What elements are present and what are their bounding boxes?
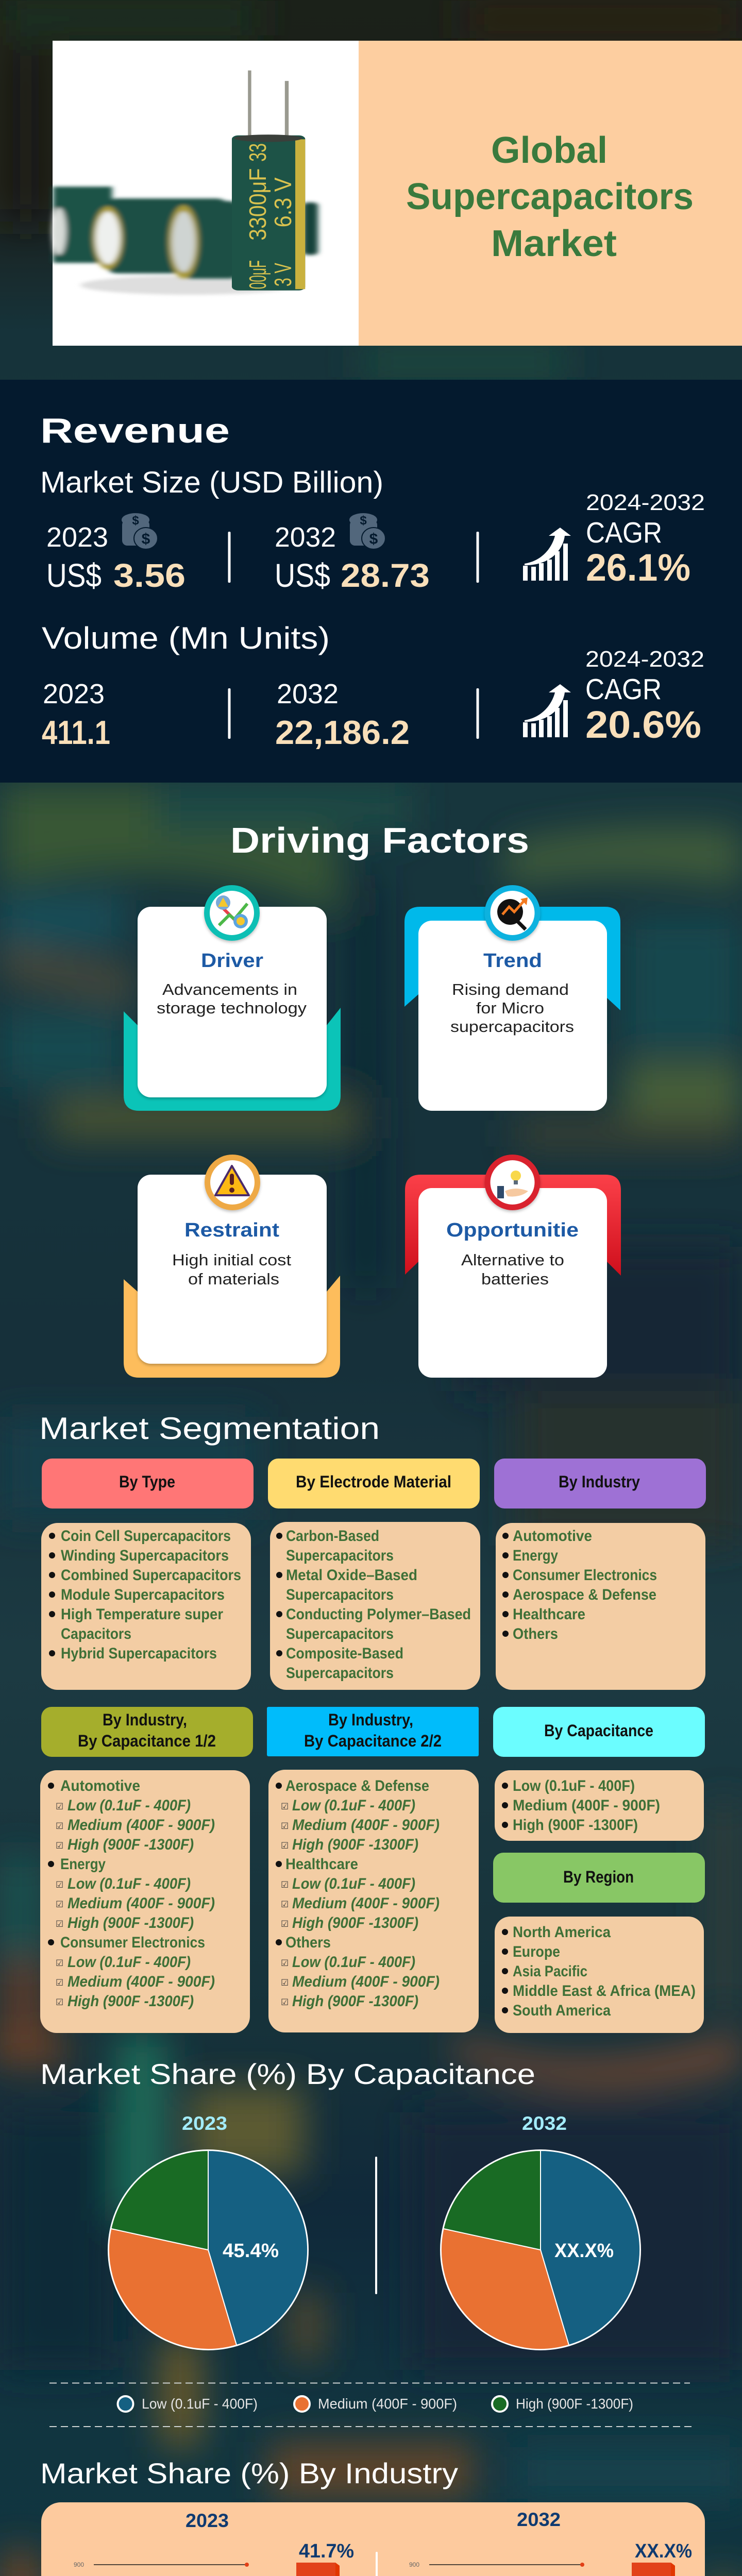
- stat: volume 2023: 2023: [43, 679, 105, 709]
- legend: capacitance: Low (0.1uF - 400F): [142, 2396, 258, 2412]
- bar chart: 2032: 900: [409, 2561, 419, 2568]
- icon: hand and bulb: [497, 1171, 528, 1198]
- list: by industry by capacitance 2/2: ☑: [281, 1841, 289, 1851]
- list: by industry by capacitance 1/2: Low (0.1uF - 400F): [68, 1875, 191, 1892]
- card: restraint: High initial cost: [172, 1251, 291, 1269]
- header: by industry: [494, 1459, 706, 1509]
- list: by industry by capacitance 2/2: Medium (400F - 900F): [292, 1817, 440, 1834]
- list: by industry by capacitance 2/2: High (900F -1300F): [292, 1836, 418, 1853]
- divider: [228, 688, 231, 739]
- title panel: Global: [491, 130, 608, 171]
- list: by electrode material: Supercapacitors: [286, 1665, 394, 1682]
- list: by industry by capacitance 1/2: Low (0.1uF - 400F): [68, 1797, 191, 1814]
- legend: capacitance: Medium (400F - 900F): [318, 2396, 457, 2412]
- list: by industry by capacitance 2/2: Low (0.1uF - 400F): [292, 1875, 415, 1892]
- list: by industry by capacitance 1/2: Energy: [60, 1856, 106, 1873]
- icon: coins 2032: $: [369, 531, 378, 548]
- title panel: Supercapacitors: [406, 176, 694, 217]
- icon: coins 2023: [122, 513, 158, 549]
- stat: CAGR revenue: 2024-2032: [586, 490, 705, 515]
- list: by industry by capacitance 1/2: Low (0.1uF - 400F): [68, 1954, 191, 1971]
- card: driver: storage technology: [157, 999, 307, 1017]
- panel: revenue: [0, 380, 742, 783]
- card: trend: Trend: [483, 950, 542, 972]
- list: by electrode material: Supercapacitors: [286, 1547, 394, 1564]
- icon: warning: [215, 1166, 249, 1195]
- header: by industry by capacitance 1/2: [41, 1707, 253, 1757]
- list: by electrode material: [270, 1522, 480, 1690]
- icon: driver: [216, 895, 248, 928]
- stat: CAGR volume: 2024-2032: [585, 647, 704, 672]
- bar chart: 2023: [74, 2510, 354, 2576]
- icon: coins 2023: $: [142, 531, 150, 548]
- list: by industry: [496, 1523, 705, 1690]
- list: by industry by capacitance 1/2: Medium (400F - 900F): [68, 1895, 215, 1912]
- list: by type: Capacitors: [61, 1625, 131, 1642]
- list: by type: Combined Supercapacitors: [61, 1567, 241, 1584]
- list: by industry by capacitance 2/2: Healthcare: [285, 1856, 358, 1873]
- heading: driving factors: Driving Factors: [230, 820, 529, 860]
- list: by type: Hybrid Supercapacitors: [61, 1645, 217, 1662]
- list: by industry by capacitance 2/2: High (900F -1300F): [292, 1993, 418, 2010]
- list: by industry by capacitance 2/2: [268, 1770, 479, 2032]
- list: by industry by capacitance 2/2: High (900F -1300F): [292, 1914, 418, 1931]
- bar chart: 2032: 2032: [517, 2509, 561, 2530]
- list: by region: [495, 1917, 704, 2033]
- list: by industry by capacitance 1/2: High (900F -1300F): [68, 1914, 194, 1931]
- header: by capacitance: By Capacitance: [544, 1721, 653, 1740]
- stat: market size 2023: 3.56: [113, 557, 185, 594]
- list: by industry by capacitance 2/2: Medium (400F - 900F): [292, 1973, 440, 1990]
- icon: coins 2023: $: [132, 514, 139, 528]
- list: by type: Winding Supercapacitors: [61, 1547, 229, 1564]
- stat: CAGR volume: 20.6%: [585, 703, 701, 746]
- list: by electrode material: Carbon-Based: [286, 1528, 379, 1545]
- list: by industry by capacitance 1/2: ☑: [56, 1841, 63, 1851]
- list: by industry by capacitance 2/2: ☑: [281, 1958, 289, 1969]
- bar chart: 2023: 41.7%: [299, 2540, 354, 2562]
- list: by electrode material: Conducting Polymer–Based: [286, 1606, 471, 1623]
- stat: CAGR revenue: 26.1%: [586, 546, 690, 589]
- list: by industry by capacitance 1/2: ☑: [56, 1958, 63, 1969]
- list: by industry: Consumer Electronics: [513, 1567, 657, 1584]
- list: by industry by capacitance 2/2: ☑: [281, 1821, 289, 1832]
- title panel: [359, 41, 742, 346]
- list: by industry by capacitance 2/2: Low (0.1uF - 400F): [292, 1954, 415, 1971]
- list: by type: High Temperature super: [61, 1606, 223, 1623]
- list: by industry by capacitance 1/2: High (900F -1300F): [68, 1993, 194, 2010]
- list: by industry: Aerospace & Defense: [513, 1586, 656, 1603]
- header: by industry by capacitance 1/2: By Capacitance 1/2: [78, 1732, 216, 1750]
- stat: market size 2032: [275, 522, 430, 594]
- icon: growth chart: [523, 684, 571, 737]
- list: by industry by capacitance 2/2: ☑: [281, 1802, 289, 1812]
- stat: CAGR volume: [585, 647, 704, 746]
- card: restraint: [124, 1155, 340, 1378]
- list: by industry by capacitance 1/2: ☑: [56, 1978, 63, 1988]
- card: trend: supercapacitors: [450, 1018, 574, 1036]
- card: opportunitie: Opportunitie: [446, 1219, 579, 1241]
- stat: market size 2032: US$: [275, 557, 330, 594]
- pie chart: 2023: 45.4%: [223, 2240, 279, 2262]
- pie chart: 2023: [108, 2113, 309, 2350]
- list: by industry by capacitance 2/2: ☑: [281, 1900, 289, 1910]
- list: by industry by capacitance 1/2: [40, 1770, 250, 2033]
- card: opportunitie: [405, 1155, 621, 1378]
- list: by region: Europe: [513, 1943, 560, 1960]
- list: by region: South America: [513, 2002, 611, 2019]
- list: by industry by capacitance 1/2: High (900F -1300F): [68, 1836, 194, 1853]
- bar chart: 2032: XX.X%: [635, 2540, 692, 2562]
- divider: [375, 2157, 377, 2294]
- list: by industry by capacitance 1/2: Automotive: [60, 1777, 140, 1794]
- heading: market share by industry: Market Share (%) By Industry: [40, 2457, 458, 2489]
- stat: market size 2032: 28.73: [341, 557, 430, 594]
- card: restraint: of materials: [188, 1270, 279, 1288]
- list: by industry by capacitance 2/2: Aerospace & Defense: [285, 1777, 429, 1794]
- header: by industry: By Industry: [559, 1472, 640, 1491]
- header: by industry by capacitance 2/2: By Capacitance 2/2: [304, 1732, 442, 1750]
- header: by electrode material: [268, 1459, 480, 1509]
- header: by region: By Region: [563, 1868, 634, 1886]
- list: by industry by capacitance 1/2: ☑: [56, 1821, 63, 1832]
- list: by type: [41, 1523, 251, 1690]
- list: by region: Asia Pacific: [513, 1963, 587, 1980]
- pie chart: 2032: XX.X%: [554, 2240, 614, 2262]
- stat: CAGR revenue: CAGR: [586, 516, 662, 549]
- icon: coins 2032: $: [360, 514, 367, 528]
- card: opportunitie: Alternative to: [461, 1251, 564, 1269]
- legend: capacitance: High (900F -1300F): [516, 2396, 633, 2412]
- list: by capacitance: [495, 1770, 704, 1841]
- heading: revenue: Revenue: [40, 411, 230, 450]
- list: by industry by capacitance 1/2: Consumer Electronics: [60, 1934, 205, 1951]
- stat: CAGR volume: CAGR: [585, 673, 662, 706]
- list: by industry: Automotive: [513, 1528, 592, 1545]
- icon: trend: [497, 897, 528, 929]
- pie chart: 2032: [440, 2113, 641, 2350]
- bar chart: 2032: [409, 2509, 692, 2576]
- stat: market size 2023: [46, 522, 185, 594]
- stat: volume 2032: 2032: [277, 679, 339, 709]
- card: driver: Driver: [201, 950, 263, 972]
- list: by industry: Healthcare: [513, 1606, 585, 1623]
- list: by industry by capacitance 2/2: ☑: [281, 1880, 289, 1890]
- list: by industry by capacitance 2/2: ☑: [281, 1919, 289, 1929]
- list: by electrode material: Supercapacitors: [286, 1625, 394, 1642]
- stat: CAGR revenue: [586, 490, 705, 589]
- stat: market size 2032: 2032: [275, 522, 336, 553]
- header: by industry by capacitance 1/2: By Industry,: [103, 1710, 187, 1729]
- header: by industry by capacitance 2/2: By Industry,: [328, 1710, 413, 1729]
- list: by industry by capacitance 2/2: Medium (400F - 900F): [292, 1895, 440, 1912]
- divider: [476, 532, 479, 583]
- card: driver: Advancements in: [162, 980, 297, 998]
- icon: growth chart: [523, 528, 571, 581]
- photo of capacitors: 6.3 V: [269, 177, 296, 227]
- card: opportunitie: batteries: [481, 1270, 549, 1288]
- list: by industry by capacitance 1/2: ☑: [56, 1880, 63, 1890]
- pie chart: 2023: 2023: [182, 2113, 227, 2134]
- list: by industry by capacitance 1/2: ☑: [56, 1900, 63, 1910]
- header: by capacitance: [493, 1707, 705, 1757]
- photo of capacitors: 3 V: [269, 263, 296, 286]
- bar chart: 2023: 900: [74, 2561, 84, 2568]
- icon: coins 2032: [349, 513, 385, 549]
- heading: volume: Volume (Mn Units): [42, 621, 330, 655]
- header: by region: [493, 1853, 705, 1903]
- photo of capacitors: 3300μF: [244, 168, 271, 241]
- list: by type: Coin Cell Supercapacitors: [61, 1528, 231, 1545]
- list: by capacitance: Low (0.1uF - 400F): [513, 1777, 635, 1794]
- stat: market size 2023: US$: [46, 557, 102, 594]
- heading: market share by capacitance: Market Share (%) By Capacitance: [40, 2058, 535, 2090]
- list: by industry by capacitance 2/2: ☑: [281, 1978, 289, 1988]
- list: by industry by capacitance 2/2: ☑: [281, 1997, 289, 2008]
- hero panel: [52, 41, 742, 346]
- list: by type: Module Supercapacitors: [61, 1586, 225, 1603]
- stat: volume 2032: [275, 679, 410, 751]
- list: by capacitance: High (900F -1300F): [513, 1817, 638, 1834]
- list: by electrode material: Supercapacitors: [286, 1586, 394, 1603]
- list: by capacitance: Medium (400F - 900F): [513, 1797, 660, 1814]
- list: by industry by capacitance 1/2: ☑: [56, 1802, 63, 1812]
- photo of capacitors: 00μF: [244, 260, 271, 289]
- list: by electrode material: Composite-Based: [286, 1645, 403, 1662]
- divider: [476, 688, 479, 739]
- divider: [228, 532, 231, 583]
- header: by industry by capacitance 2/2: [267, 1707, 479, 1756]
- stat: volume 2032: 22,186.2: [275, 714, 410, 751]
- list: by industry by capacitance 1/2: Medium (400F - 900F): [68, 1973, 215, 1990]
- stat: volume 2023: [42, 679, 110, 751]
- stat: market size 2023: 2023: [46, 522, 108, 553]
- card: trend: [404, 885, 620, 1111]
- list: by industry by capacitance 2/2: Others: [285, 1934, 331, 1951]
- header: by type: By Type: [119, 1472, 175, 1491]
- stat: volume 2023: 411.1: [42, 714, 110, 751]
- card: driver: [124, 885, 341, 1111]
- list: by industry by capacitance 1/2: Medium (400F - 900F): [68, 1817, 215, 1834]
- heading: market segmentation: Market Segmentation: [39, 1411, 380, 1446]
- list: by electrode material: Metal Oxide–Based: [286, 1567, 417, 1584]
- list: by industry by capacitance 1/2: ☑: [56, 1997, 63, 2008]
- heading: market size: Market Size (USD Billion): [40, 466, 383, 499]
- divider: [376, 2552, 378, 2576]
- list: by industry by capacitance 1/2: ☑: [56, 1919, 63, 1929]
- photo of capacitors: [52, 41, 359, 346]
- card: restraint: Restraint: [184, 1219, 279, 1241]
- list: by industry: Energy: [513, 1547, 558, 1564]
- list: by industry: Others: [513, 1625, 558, 1642]
- card: trend: for Micro: [476, 999, 544, 1017]
- card: trend: Rising demand: [452, 980, 569, 998]
- pie chart: 2032: 2032: [522, 2113, 567, 2134]
- title panel: Market: [491, 223, 617, 264]
- list: by region: Middle East & Africa (MEA): [513, 1982, 696, 1999]
- bar chart: 2023: 2023: [185, 2510, 229, 2531]
- legend: capacitance: [49, 2383, 695, 2427]
- photo of capacitors: 33: [244, 143, 271, 162]
- list: by region: North America: [513, 1924, 611, 1941]
- panel: industry bar charts: [41, 2502, 705, 2576]
- list: by industry by capacitance 2/2: Low (0.1uF - 400F): [292, 1797, 415, 1814]
- header: by electrode material: By Electrode Material: [296, 1472, 451, 1491]
- header: by type: [42, 1459, 254, 1509]
